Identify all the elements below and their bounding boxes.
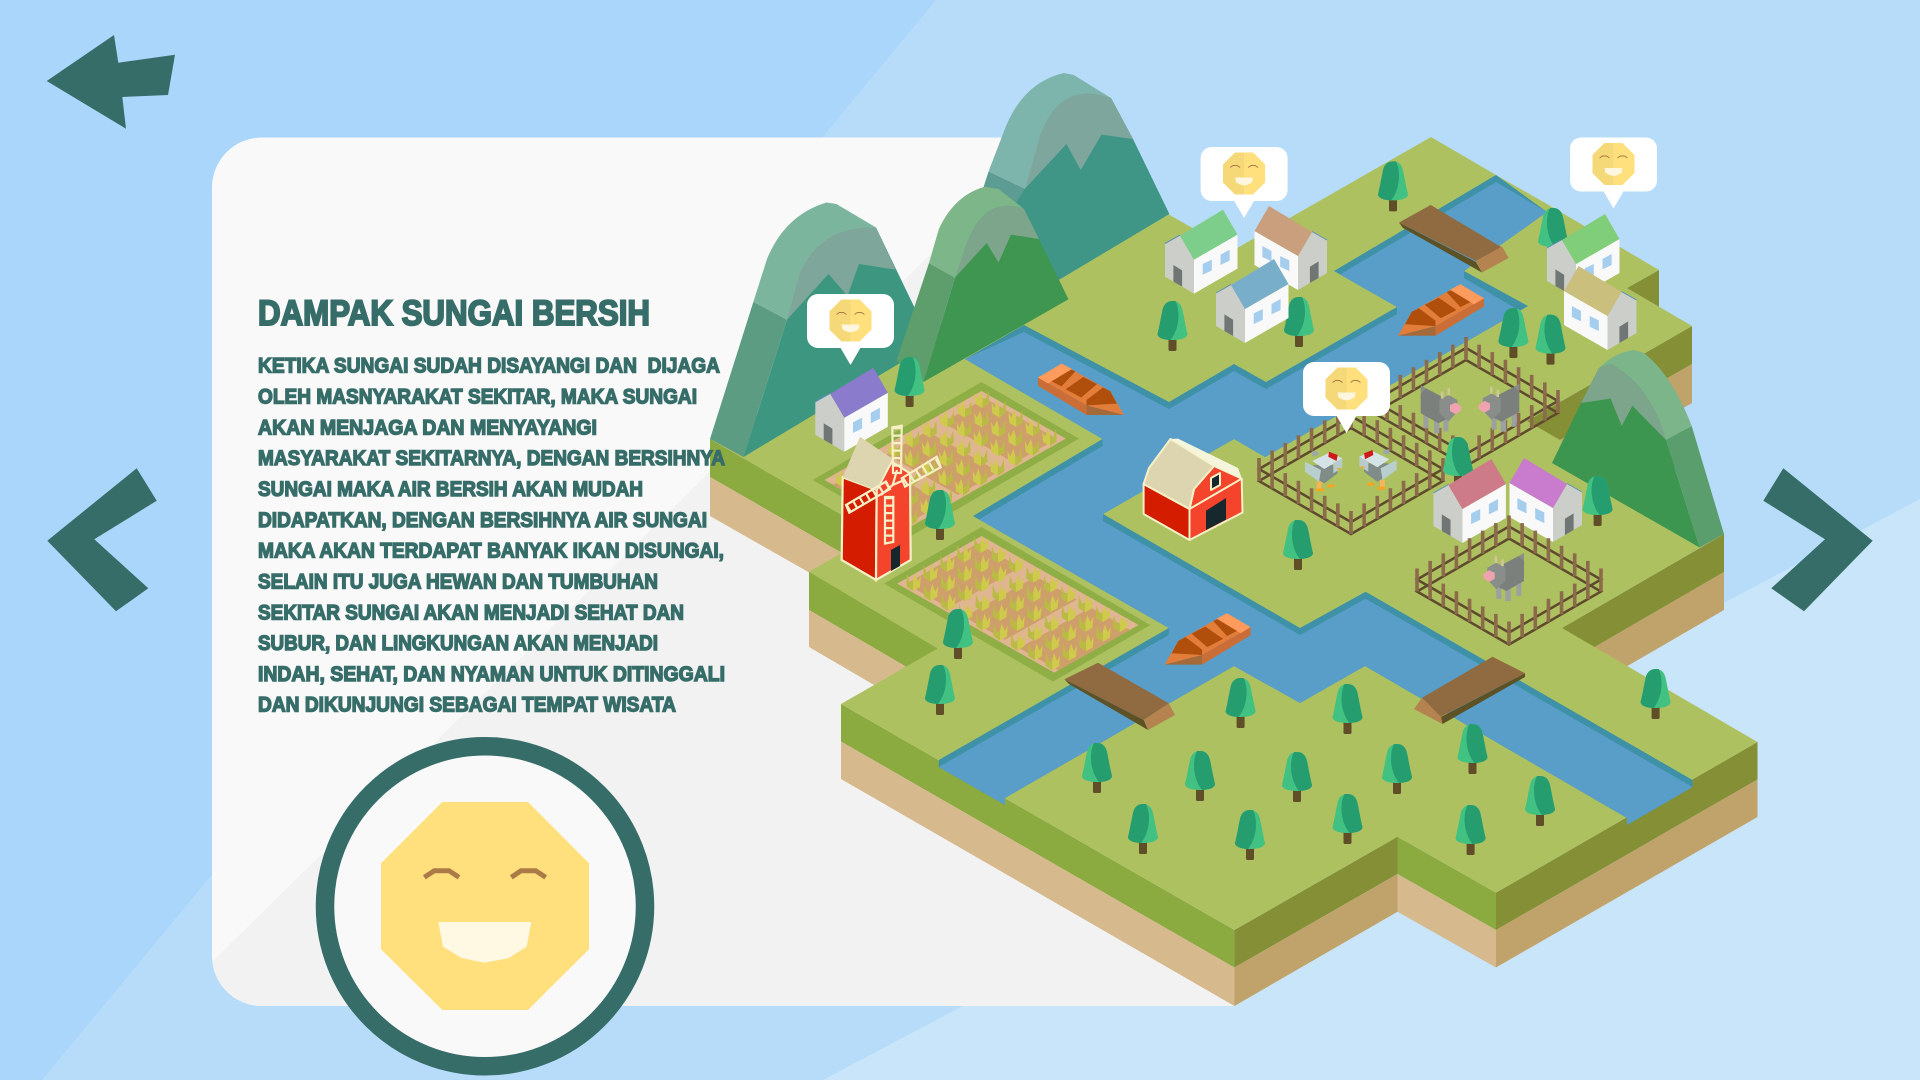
mountain: right [1552,350,1724,548]
house: pink roof [1433,459,1506,543]
cow: left in pen [1421,385,1461,433]
body text: SELAIN ITU JUGA HEWAN DAN TUMBUHAN [258,570,658,593]
island grass surface [710,137,1758,930]
house: light green roof [1547,214,1620,298]
speech bubble: top right houses [1570,138,1657,208]
rice field: upper [813,382,1079,537]
panel: content card [200,130,1300,1020]
speech bubble: chicken pen [1303,362,1390,433]
river [939,182,1692,825]
rice field: lower [884,527,1150,682]
pen: chickens [1259,405,1443,534]
barn [1144,439,1242,540]
bridge: lower right [1414,657,1525,724]
mountain: back teal [960,73,1169,315]
house: brown roof [1254,206,1327,290]
trees: forest [925,609,1671,860]
house: khaki roof [1564,266,1636,350]
island side faces [710,270,1758,1006]
icon: previous chevron [47,468,157,611]
river bank [939,175,1692,825]
chicken: left [1305,451,1342,491]
body text: MAKA AKAN TERDAPAT BANYAK IKAN DISUNGAI, [258,540,724,563]
body text: DIDAPATKAN, DENGAN BERSIHNYA AIR SUNGAI [258,509,707,532]
pen: single cow [1417,516,1601,644]
body text: MASYARAKAT SEKITARNYA, DENGAN BERSIHNYA [258,447,725,470]
boat: upper right [1398,284,1484,336]
house: violet roof [1510,458,1582,542]
icon: big smiling face badge [325,746,645,1066]
body text: INDAH, SEHAT, DAN NYAMAN UNTUK DITINGGALI [258,663,725,686]
cow: lower pen [1483,553,1524,601]
body text: SUBUR, DAN LINGKUNGAN AKAN MENJADI [258,632,658,655]
body text: OLEH MASNYARAKAT SEKITAR, MAKA SUNGAI [258,386,697,408]
title: DAMPAK SUNGAI BERSIH [258,294,650,333]
cow: right in pen [1479,384,1519,432]
body text: DAN DIKUNJUNGI SEBAGAI TEMPAT WISATA [258,694,676,717]
speech bubble: village [1201,147,1288,218]
chicken: right [1359,449,1397,490]
tree behind right mountain [1660,417,1690,467]
icon: back arrow [47,35,175,129]
boat: left [1038,364,1124,415]
trees: village and fields [895,161,1613,570]
house: green roof [1165,210,1238,294]
boat: lower [1165,613,1251,665]
body text [258,355,725,717]
mountain: green [896,187,1068,382]
pen: cows [1374,337,1558,466]
body text: KETIKA SUNGAI SUDAH DISAYANGI DAN DIJAGA [258,355,720,378]
house: purple roof [815,368,888,452]
windmill [842,426,941,580]
bridge: lower left [1064,663,1175,730]
isometric village island [710,73,1758,1006]
icon: next chevron [1763,468,1873,611]
speech bubble: farm house [807,294,894,365]
body text: SEKITAR SUNGAI AKAN MENJADI SEHAT DAN [258,601,684,624]
bridge: top [1399,205,1509,272]
mountain: left teal [710,202,930,457]
body text: AKAN MENJAGA DAN MENYAYANGI [258,416,597,439]
house: blue roof [1216,259,1288,343]
body text: SUNGAI MAKA AIR BERSIH AKAN MUDAH [258,478,643,501]
